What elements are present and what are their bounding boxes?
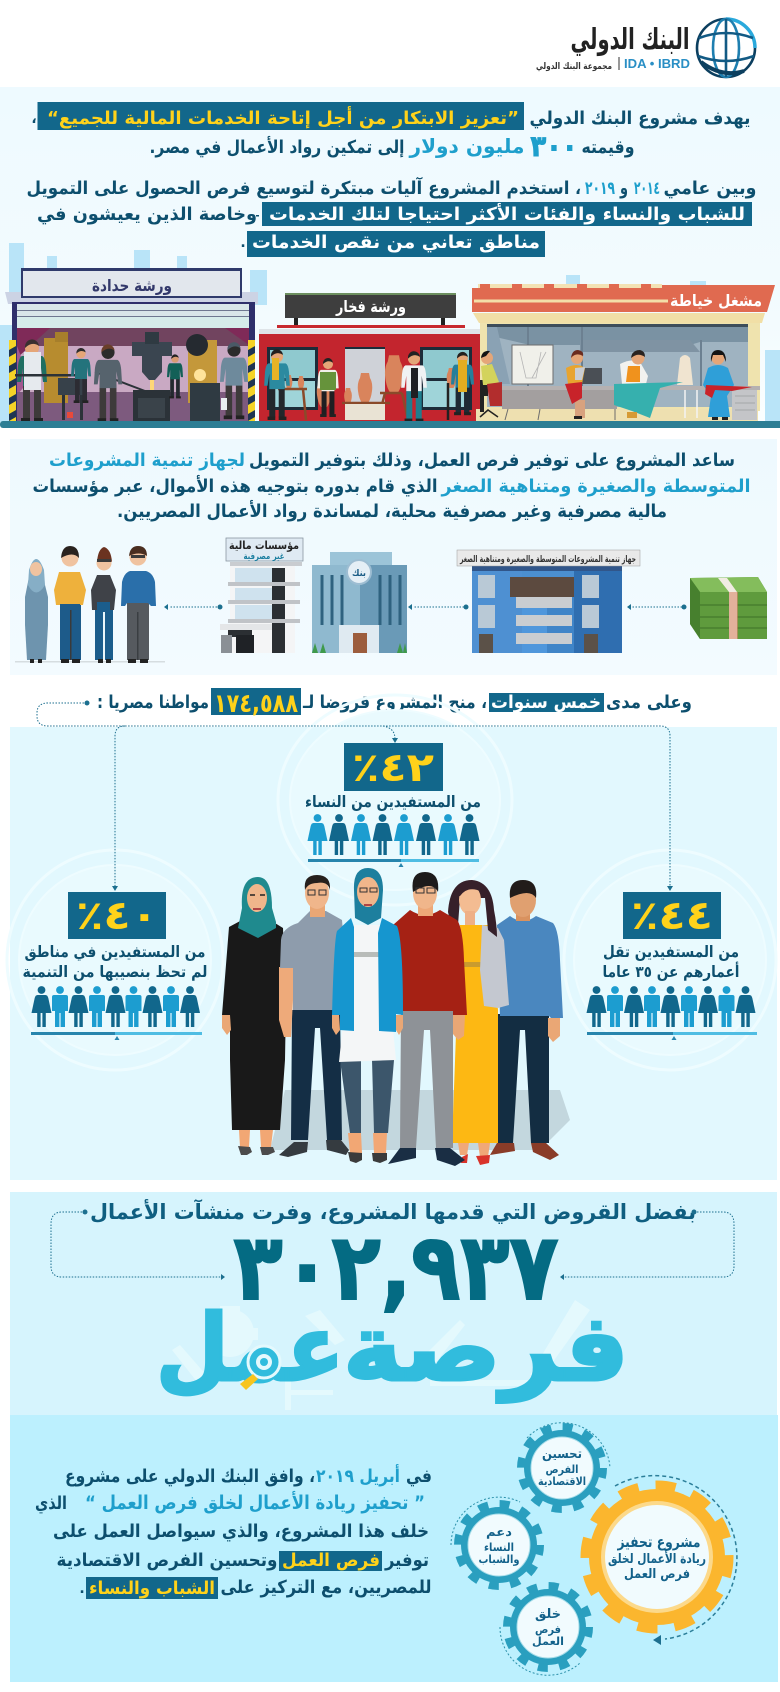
arrow — [627, 604, 686, 610]
label — [602, 943, 740, 981]
person: woman in yellow dress — [448, 880, 509, 1165]
shutter — [17, 304, 249, 328]
sign: tailoring — [472, 284, 775, 312]
statistic: 40% underdeveloped areas: ٪٤٠ — [76, 893, 158, 939]
line 4: توفير — [384, 1550, 429, 1571]
bar — [31, 1032, 202, 1040]
sign: pottery — [285, 293, 456, 325]
statistic: 42% women — [305, 743, 481, 867]
sign: non-bank — [226, 538, 303, 562]
cutting table — [502, 355, 760, 420]
diagram: project gears — [451, 1423, 737, 1675]
big word — [156, 1295, 629, 1403]
workshop: tailoring — [472, 284, 775, 421]
flow diagram: money to entrepreneurs — [15, 538, 767, 663]
ground — [0, 421, 780, 428]
logo wordmark: البنك الدولي — [570, 22, 690, 56]
gear: improve opportunities — [521, 1423, 610, 1509]
gear: main project: مشروع تحفيز — [617, 1533, 700, 1551]
sign: pottery: ورشة فخار — [335, 297, 406, 316]
workshop: forge — [5, 268, 258, 422]
highlight: number of citizens: ١٧٤,٥٨٨ — [214, 689, 298, 719]
woman in blue dress — [703, 350, 752, 420]
line 5: للمصريين، مع التركيز على — [220, 1577, 432, 1598]
gear: support women and youth: والشباب — [478, 1553, 520, 1566]
person: man in yellow — [54, 546, 86, 663]
headline: jobs created — [90, 1198, 696, 1403]
logo group name: مجموعة البنك الدولي — [536, 62, 612, 72]
line 2: value — [150, 129, 634, 163]
building: non-bank institution — [220, 538, 303, 653]
line 3: ٢٠١٩ — [585, 178, 615, 199]
line 4: فرص العمل — [282, 1550, 380, 1571]
gear: support women and youth: النساء — [484, 1541, 514, 1554]
people: entrepreneurs — [15, 546, 165, 663]
text block: introduction: ، — [31, 111, 37, 127]
gear: improve opportunities: تحسين — [542, 1447, 582, 1462]
highlight: youth and women: للشباب والنساء والفئات الأكثر احتياجا لتلك الخدمات — [269, 203, 745, 225]
pottery workers — [264, 349, 474, 422]
line 1: أبريل ٢٠١٩ — [316, 1464, 400, 1487]
big number: ٣٠٢,٩٣٧ — [234, 1214, 558, 1321]
sign: tailoring: مشغل خياطة — [670, 291, 762, 310]
icon: magnifier with gear — [240, 1346, 280, 1390]
statistic: 44% under 35 — [586, 892, 757, 1040]
pictogram row — [32, 986, 200, 1027]
person: woman in grey — [91, 547, 116, 663]
text block: financing: لجهاز تنمية المشروعات — [49, 450, 245, 471]
label: من المستفيدين تقل — [603, 943, 739, 961]
forge workers — [15, 339, 248, 422]
line 1 text: يهدف مشروع البنك الدولي — [530, 108, 750, 129]
highlight: underserved areas: مناطق تعاني من نقص الخدمات — [252, 232, 540, 253]
gear: main project: ريادة الأعمال لخلق — [608, 1550, 706, 1567]
highlight: five years: خمس سنوات — [491, 692, 601, 713]
line 3: استخدم المشروع آليات مبتكرة لتوسيع فرص الحصول على التمويل — [26, 176, 570, 199]
headline: jobs created: بفضل القروض التي قدمها المشروع، وفرت منشآت الأعمال — [90, 1198, 696, 1224]
line 3: و — [619, 178, 628, 199]
logo: World Bank — [536, 19, 755, 77]
shadow — [270, 1090, 570, 1150]
arrow — [408, 604, 468, 610]
line 5: . — [79, 1581, 85, 1597]
label: لم تحظ بنصيبها من التنمية — [22, 963, 208, 981]
text block: financing: الذي قام بدوره بتوجيه هذه الأموال، عبر مؤسسات — [32, 475, 438, 497]
line 2: value: ٣٠٠ — [530, 129, 578, 163]
gear: create jobs — [500, 1586, 589, 1675]
sign: MSMEDA — [457, 550, 640, 566]
tables — [278, 383, 448, 420]
tailors — [480, 350, 752, 420]
label: من المستفيدين من النساء — [305, 793, 481, 811]
heading: loans to citizens: وعلى مدى — [606, 692, 692, 713]
logo subtitle: IDA • IBRD — [624, 56, 690, 71]
label: من المستفيدين في مناطق — [24, 943, 206, 962]
line 3: خلف هذا المشروع، والذي سيواصل العمل على — [53, 1521, 429, 1542]
illustration: six beneficiaries — [222, 868, 570, 1166]
badge: ٪٤٢ — [352, 745, 434, 791]
awning — [473, 313, 765, 323]
sign: MSMEDA: جهاز تنمية المشروعات المتوسطة والصغيرة ومتناهية الصغر — [459, 554, 636, 565]
illustration: workshops row — [0, 243, 780, 428]
facade — [480, 323, 760, 411]
gear: main project — [586, 1476, 737, 1645]
person: man in grey shirt — [279, 875, 349, 1157]
bar — [308, 859, 479, 867]
text block: introduction — [26, 102, 756, 257]
text block: new project — [35, 1464, 432, 1599]
decorative: faint tools behind headline — [172, 1300, 590, 1410]
statistic: 44% under 35: ٪٤٤ — [631, 893, 713, 939]
heading: loans to citizens: مواطنا مصريا : — [97, 692, 209, 713]
building: bank: بنك — [352, 569, 366, 579]
workshop: pottery — [259, 293, 484, 422]
heading: loans to citizens: ، منح المشروع قروضا لـ — [302, 692, 487, 713]
arrow — [164, 604, 222, 610]
dotted connector: around number — [51, 1210, 734, 1280]
line 2: value: مليون دولار — [408, 134, 524, 158]
line 3: وبين عامي — [664, 178, 756, 199]
line 5: الشباب والنساء — [89, 1578, 215, 1599]
line 4 — [56, 1550, 429, 1571]
woman at sewing machine — [565, 350, 585, 419]
gear: create jobs: فرص — [535, 1623, 561, 1636]
sign: forge — [22, 268, 241, 297]
icon: money stack — [690, 577, 767, 639]
pictogram row — [586, 986, 756, 1027]
pictogram row — [308, 814, 480, 855]
line 4: وتحسين الفرص الاقتصادية — [56, 1550, 278, 1571]
sign: forge: ورشة حدادة — [92, 276, 172, 295]
woman cutting cloth — [614, 350, 683, 418]
building: MSMEDA — [457, 550, 640, 653]
text block: introduction: وخاصة الذين يعيشون في — [37, 204, 257, 225]
sign: non-bank: مؤسسات مالية — [229, 539, 299, 552]
label — [22, 943, 208, 981]
text block: financing: المتوسطة والصغيرة ومتناهية الصغر — [441, 476, 750, 497]
icon: globe — [697, 19, 755, 77]
gear: main project: فرص العمل — [624, 1567, 690, 1582]
gear: create jobs: خلق — [535, 1607, 561, 1622]
text block: financing — [32, 450, 750, 522]
big word: عمل — [156, 1295, 344, 1402]
building: bank — [312, 552, 407, 653]
sign: non-bank: غير مصرفية — [244, 552, 284, 562]
gear: support women and youth: دعم — [486, 1525, 512, 1539]
text block: financing: مالية مصرفية وغير مصرفية محلية، لمساندة رواد الأعمال المصريين. — [117, 500, 667, 522]
person: woman in blue coat — [332, 868, 403, 1163]
line 2: value: وقيمته — [582, 137, 634, 158]
statistic: 40% underdeveloped areas — [22, 892, 208, 1040]
person: man in blue sweater — [490, 880, 563, 1160]
hazard stripes — [9, 340, 255, 422]
bar — [587, 1032, 757, 1040]
highlight: project name: ”تعزيز الابتكار من أجل إتاحة الخدمات المالية للجميع“ — [47, 106, 519, 129]
line 2: الذي — [35, 1493, 67, 1514]
background skyline — [0, 243, 780, 422]
text block: financing: ساعد المشروع على توفير فرص العمل، وذلك بتوفير التمويل — [249, 450, 735, 471]
gear: improve opportunities: الاقتصادية — [538, 1475, 586, 1488]
text block: introduction: . — [240, 235, 246, 251]
line 1: في — [406, 1466, 432, 1487]
person: woman in black abaya — [222, 877, 286, 1155]
gear: support women and youth — [451, 1497, 540, 1586]
pattern board — [512, 345, 553, 384]
line 3: ٢٠١٤ — [634, 178, 660, 199]
person: woman in hijab — [25, 559, 48, 663]
dotted connector: to statistics — [37, 700, 673, 891]
forge machines — [44, 332, 220, 422]
line 3: ، — [575, 179, 581, 198]
woman at chair — [480, 351, 502, 417]
big word: فرصة — [343, 1295, 629, 1403]
gear: improve opportunities: الفرص — [546, 1463, 578, 1476]
heading: loans to citizens — [97, 688, 692, 719]
decorative rings: beneficiaries — [7, 695, 776, 1070]
label: أعمارهم عن ٣٥ عاما — [602, 962, 740, 981]
windows — [267, 347, 472, 420]
line 1: ، وافق البنك الدولي على مشروع — [65, 1466, 315, 1487]
pottery pieces — [286, 355, 456, 407]
line 2: ” تحفيز ريادة الأعمال لخلق فرص العمل “ — [85, 1491, 425, 1514]
person: man in blue — [121, 546, 156, 663]
line 2: value: إلى تمكين رواد الأعمال في مصر. — [150, 136, 404, 158]
person: man in red sweater — [388, 872, 467, 1166]
line 5 — [79, 1577, 432, 1599]
gear: create jobs: العمل — [532, 1635, 564, 1648]
